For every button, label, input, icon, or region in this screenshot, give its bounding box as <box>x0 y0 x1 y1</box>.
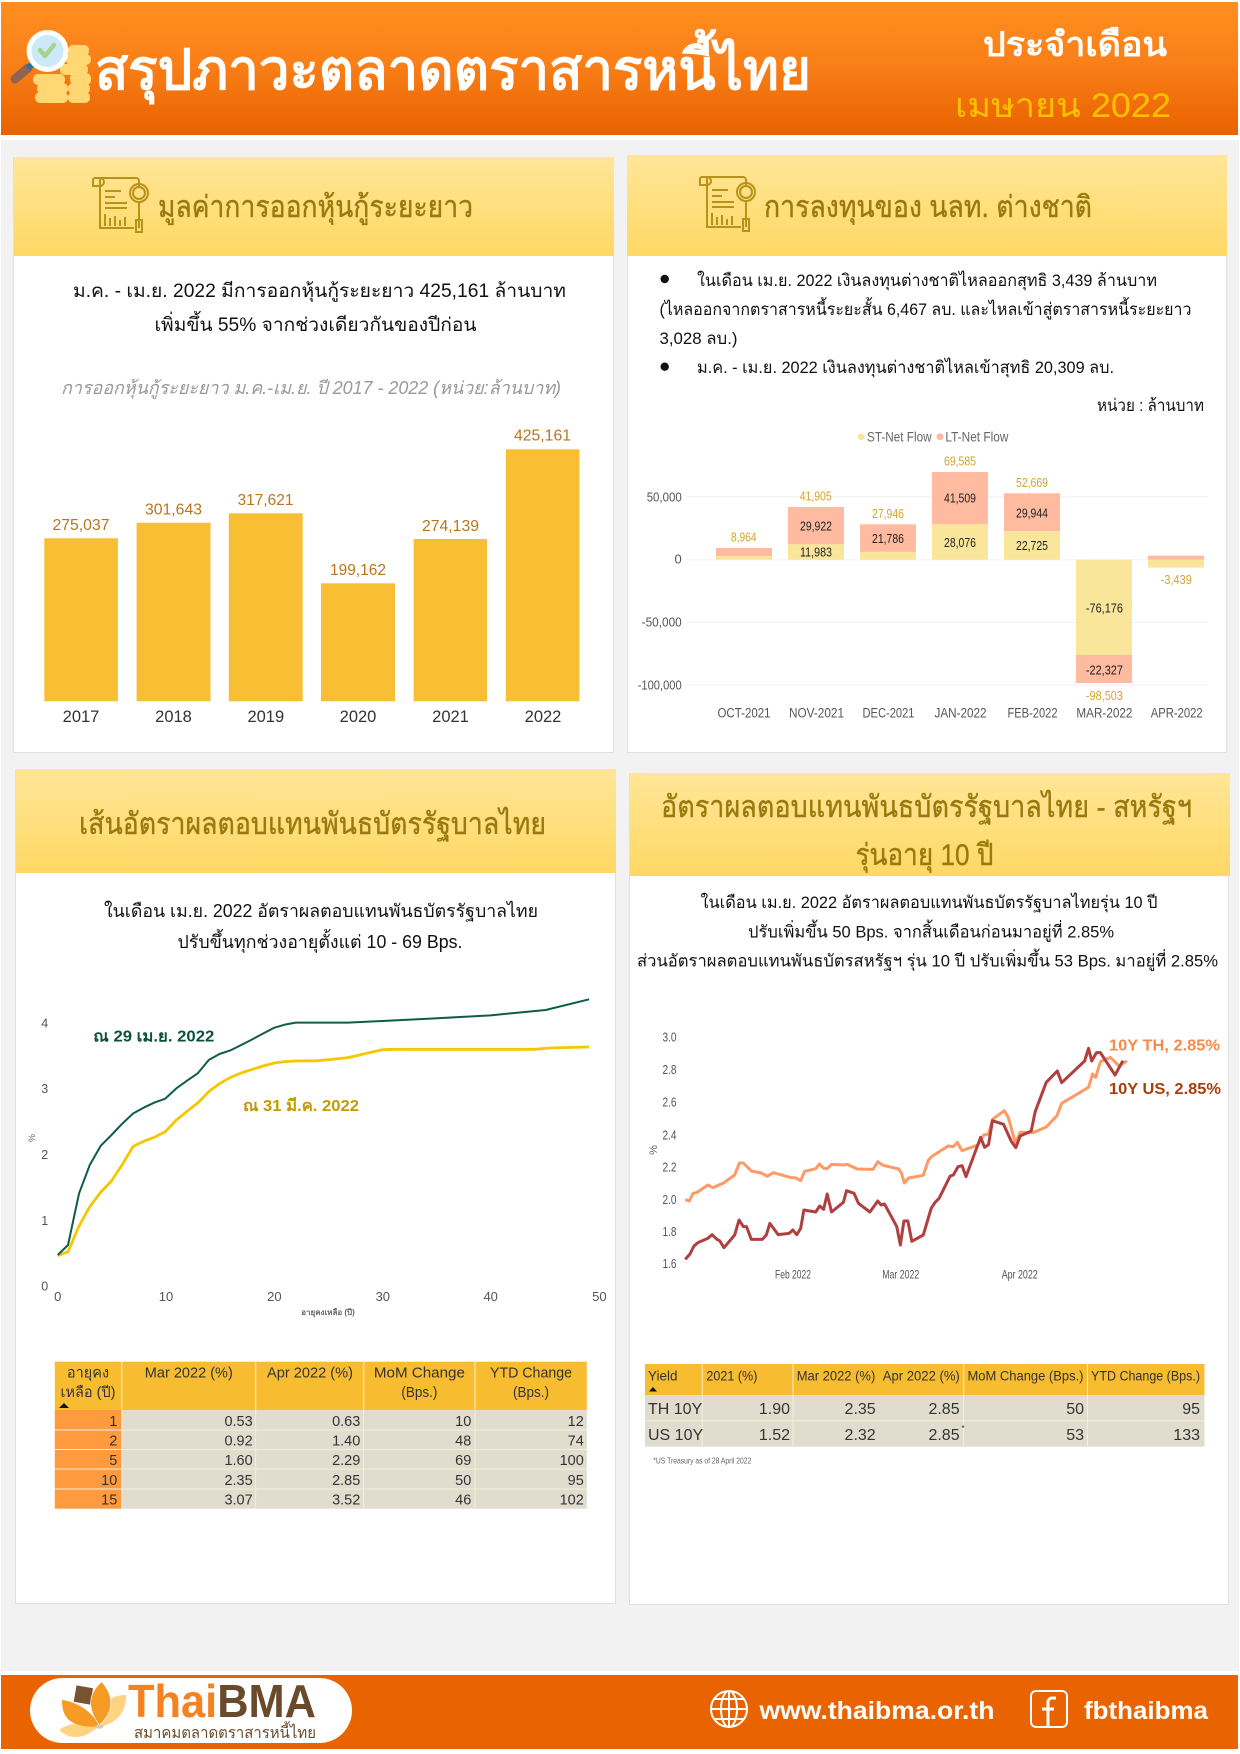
table: 10-year yield comparison: YTD Change (Bps.) <box>1091 1369 1200 1384</box>
table: yield changes by maturity: 100 <box>560 1453 584 1469</box>
table: 10-year yield comparison: Apr 2022 (%) <box>883 1369 960 1384</box>
table: yield changes by maturity: Apr 2022 (%) <box>267 1366 353 1382</box>
bar chart: issuance by year: 2019 <box>247 708 284 726</box>
stacked bar chart: net flows: FEB-2022 <box>1008 706 1058 721</box>
summary text: ในเดือน เม.ย. 2022 อัตราผลตอบแทนพันธบัตรรัฐบาลไทยรุ่น 10 ปี <box>700 892 1158 913</box>
table: yield changes by maturity: 12 <box>568 1414 584 1430</box>
stacked bar chart: net flows: 0 <box>674 552 682 567</box>
table: yield changes by maturity: 74 <box>568 1434 584 1450</box>
table: yield changes by maturity: 1 <box>109 1414 117 1430</box>
summary text <box>104 900 538 953</box>
table: yield changes by maturity: 0.92 <box>224 1434 253 1450</box>
stacked bar chart: net flows: NOV-2021 <box>789 706 844 721</box>
table: yield changes by maturity: (Bps.) <box>401 1385 437 1401</box>
title: สรุปภาวะตลาดตราสารหนี้ไทย <box>95 29 811 105</box>
heading: เส้นอัตราผลตอบแทนพันธบัตรรัฐบาลไทย <box>79 806 546 842</box>
table: 10-year yield comparison: 2.32 <box>845 1427 876 1444</box>
table: yield changes by maturity: YTD Change <box>490 1366 572 1382</box>
table: yield changes by maturity: 69 <box>455 1453 471 1469</box>
stacked bar chart: net flows <box>638 454 1208 721</box>
logo wordmark: ThaiBMA <box>128 1675 316 1727</box>
bar chart: issuance by year <box>44 428 579 726</box>
line chart: 10-year yields: Mar 2022 <box>882 1268 919 1282</box>
table: yield changes by maturity: 50 <box>455 1473 471 1489</box>
bullet text: 3,028 ลบ.) <box>660 329 738 348</box>
line chart: yield curve: 3 <box>41 1082 48 1096</box>
line chart: yield curve: 4 <box>41 1016 48 1030</box>
icon: globe <box>711 1691 747 1727</box>
bar chart: issuance by year: 425,161 <box>514 428 571 445</box>
facebook handle: fbthaibma <box>1084 1697 1209 1725</box>
bar chart: issuance by year: 301,643 <box>145 501 202 518</box>
unit note: หน่วย : ล้านบาท <box>1097 396 1204 415</box>
summary text: ส่วนอัตราผลตอบแทนพันธบัตรสหรัฐฯ รุ่น 10 ปี ปรับเพิ่มขึ้น 53 Bps. มาอยู่ที่ 2.85% <box>637 949 1218 972</box>
label: TH series: 10Y TH, 2.85% <box>1109 1038 1220 1055</box>
table: yield changes by maturity: (Bps.) <box>513 1385 549 1401</box>
website: www.thaibma.or.th <box>758 1697 994 1725</box>
stacked bar chart: net flows: OCT-2021 <box>718 706 770 721</box>
table: yield changes by maturity: 48 <box>455 1434 471 1450</box>
table: yield changes by maturity: 10 <box>101 1473 117 1489</box>
line chart: yield curve: 30 <box>376 1289 390 1304</box>
stacked bar chart: net flows: 22,725 <box>1016 538 1048 553</box>
label: month and year: เมษายน 2022 <box>955 87 1171 125</box>
icon: report with magnifier <box>93 178 148 232</box>
line chart: 10-year yields: % <box>648 1145 660 1155</box>
table: 10-year yield comparison: 95 <box>1182 1401 1200 1418</box>
line chart: 10-year yields: Feb 2022 <box>775 1268 811 1282</box>
panel: long-term bond issuance <box>14 157 614 752</box>
table: yield changes by maturity: 5 <box>109 1453 117 1469</box>
panel: Thai vs US 10-year yields <box>630 773 1230 1604</box>
panel: Thai government yield curve <box>16 769 616 1604</box>
icon: facebook <box>1031 1691 1067 1727</box>
table: 10-year yield comparison: 2.35 <box>845 1401 876 1418</box>
bar chart: issuance by year: 2020 <box>340 708 376 726</box>
line chart: yield curve: 0 <box>41 1280 48 1294</box>
line chart: 10-year yields: 3.0 <box>662 1030 676 1045</box>
icon: coins and magnifier <box>15 30 91 103</box>
table: 10-year yield comparison: * <box>962 1424 965 1433</box>
table: yield changes by maturity: MoM Change <box>374 1366 465 1382</box>
line chart: yield curve: อายุคงเหลือ (ปี) <box>301 1307 355 1318</box>
line chart: 10-year yields: 2.8 <box>662 1062 676 1077</box>
table: 10-year yield comparison: 2021 (%) <box>706 1369 757 1384</box>
legend <box>858 429 1009 445</box>
stacked bar chart: net flows: 21,786 <box>872 531 904 546</box>
summary text <box>73 280 566 336</box>
table: yield changes by maturity: 0.53 <box>224 1414 253 1430</box>
table: 10-year yield comparison: 53 <box>1066 1427 1084 1444</box>
line chart: 10-year yields: 2.2 <box>662 1160 676 1175</box>
line chart: yield curve: 10 <box>159 1289 173 1304</box>
stacked bar chart: net flows: 50,000 <box>647 490 682 505</box>
stacked bar chart: net flows: MAR-2022 <box>1076 706 1132 721</box>
line chart: yield curve: 50 <box>592 1289 607 1304</box>
label: US series: 10Y US, 2.85% <box>1109 1081 1221 1098</box>
table: yield changes by maturity: 95 <box>568 1473 584 1489</box>
stacked bar chart: net flows: APR-2022 <box>1151 706 1203 721</box>
table: yield changes by maturity: 15 <box>101 1493 117 1509</box>
logo pill <box>30 1675 352 1743</box>
bar chart: issuance by year: 2022 <box>525 708 561 726</box>
table: 10-year yield comparison: Mar 2022 (%) <box>797 1369 875 1384</box>
bar chart: issuance by year: 2017 <box>63 708 99 726</box>
stacked bar chart: net flows: 52,669 <box>1016 475 1048 490</box>
line chart: yield curve <box>27 999 607 1318</box>
stacked bar chart: net flows: -22,327 <box>1086 662 1123 677</box>
stacked bar chart: net flows: -98,503 <box>1086 688 1123 703</box>
line chart: yield curve: 1 <box>41 1214 48 1228</box>
table: yield changes by maturity: 3.07 <box>224 1493 253 1509</box>
table: yield changes by maturity: 2 <box>109 1434 117 1450</box>
summary text <box>637 892 1218 972</box>
summary text: เพิ่มขึ้น 55% จากช่วงเดียวกันของปีก่อน <box>154 311 477 336</box>
heading: อัตราผลตอบแทนพันธบัตรรัฐบาลไทย - สหรัฐฯ <box>661 789 1192 825</box>
table: yield changes by maturity: 46 <box>455 1493 471 1509</box>
chart subtitle: การออกหุ้นกู้ระยะยาว ม.ค.-เม.ย. ปี 2017 - 2022 (หน่วย:ล้านบาท) <box>61 378 561 399</box>
bar chart: issuance by year: 2018 <box>155 708 192 726</box>
stacked bar chart: net flows: 41,509 <box>944 491 976 506</box>
table: yield changes by maturity: 102 <box>560 1493 584 1509</box>
logo tagline: สมาคมตลาดตราสารหนี้ไทย <box>134 1721 316 1742</box>
stacked bar chart: net flows: 27,946 <box>872 506 904 521</box>
stacked bar chart: net flows: 8,964 <box>731 530 757 545</box>
table: yield changes by maturity: 3.52 <box>332 1493 360 1509</box>
line chart: 10-year yields: 1.6 <box>662 1256 676 1271</box>
label: monthly: ประจำเดือน <box>983 26 1167 64</box>
icon: lotus <box>59 1682 126 1737</box>
table: yield changes by maturity: 0.63 <box>332 1414 360 1430</box>
table: 10-year yield comparison: 133 <box>1173 1427 1200 1444</box>
table: 10-year yield comparison: 50 <box>1066 1401 1084 1418</box>
summary text: ปรับเพิ่มขึ้น 50 Bps. จากสิ้นเดือนก่อนมาอยู่ที่ 2.85% <box>748 920 1114 943</box>
legend: ST-Net Flow <box>867 429 932 445</box>
table: yield changes by maturity: 10 <box>455 1414 471 1430</box>
heading <box>661 789 1192 874</box>
stacked bar chart: net flows: 29,922 <box>800 519 832 534</box>
header banner <box>1 2 1238 135</box>
stacked bar chart: net flows: -50,000 <box>642 615 682 630</box>
table: yield changes by maturity <box>55 1362 587 1509</box>
table: yield changes by maturity: 1.60 <box>224 1453 253 1469</box>
summary text: ปรับขึ้นทุกช่วงอายุตั้งแต่ 10 - 69 Bps. <box>178 929 462 953</box>
stacked bar chart: net flows: -3,439 <box>1161 572 1192 587</box>
footnote: *US Treasury as of 28 April 2022 <box>653 1456 752 1465</box>
stacked bar chart: net flows: -100,000 <box>638 677 682 692</box>
table: 10-year yield comparison: MoM Change (Bps.) <box>968 1369 1084 1384</box>
line chart: 10-year yields: 1.8 <box>662 1224 676 1239</box>
bar chart: issuance by year: 199,162 <box>330 562 386 579</box>
table: 10-year yield comparison: 1.52 <box>759 1427 790 1444</box>
icon: report with magnifier <box>700 177 755 231</box>
line chart: yield curve: 2 <box>41 1148 48 1162</box>
line chart: 10-year yields: 2.0 <box>662 1192 676 1207</box>
stacked bar chart: net flows: 11,983 <box>800 545 832 560</box>
bullet text: (ไหลออกจากตราสารหนี้ระยะสั้น 6,467 ลบ. และไหลเข้าสู่ตราสารหนี้ระยะยาว <box>660 297 1192 320</box>
summary text: ในเดือน เม.ย. 2022 อัตราผลตอบแทนพันธบัตรรัฐบาลไทย <box>104 900 538 922</box>
bullet text: ม.ค. - เม.ย. 2022 เงินลงทุนต่างชาติไหลเข้าสุทธิ 20,309 ลบ. <box>697 357 1114 378</box>
table: 10-year yield comparison: Yield <box>648 1369 678 1384</box>
table: yield changes by maturity: เหลือ (ปี) <box>60 1384 116 1401</box>
line chart: 10-year yields <box>648 1030 1127 1282</box>
line chart: 10-year yields: 2.4 <box>662 1127 676 1142</box>
table: 10-year yield comparison: 1.90 <box>759 1401 790 1418</box>
bar chart: issuance by year: 274,139 <box>422 518 479 535</box>
bar chart: issuance by year: 275,037 <box>52 517 110 534</box>
table: 10-year yield comparison: 2.85 <box>928 1401 960 1418</box>
table: yield changes by maturity: 2.35 <box>224 1473 253 1489</box>
stacked bar chart: net flows: 28,076 <box>944 535 976 550</box>
stacked bar chart: net flows: 29,944 <box>1016 505 1048 520</box>
table: 10-year yield comparison: 2.85 <box>928 1427 960 1444</box>
stacked bar chart: net flows: 41,905 <box>800 489 832 504</box>
bullet text: ในเดือน เม.ย. 2022 เงินลงทุนต่างชาติไหลออกสุทธิ 3,439 ล้านบาท <box>697 270 1157 291</box>
table: yield changes by maturity: Mar 2022 (%) <box>145 1366 233 1382</box>
table: 10-year yield comparison: TH 10Y <box>648 1401 703 1418</box>
table: 10-year yield comparison <box>645 1364 1204 1447</box>
bullet text <box>660 270 1192 378</box>
line chart: 10-year yields: Apr 2022 <box>1002 1268 1038 1282</box>
stacked bar chart: net flows: -76,176 <box>1086 601 1123 616</box>
table: yield changes by maturity: 1.40 <box>332 1434 360 1450</box>
line chart: yield curve: % <box>27 1134 37 1142</box>
line chart: yield curve: 40 <box>483 1289 498 1304</box>
line chart: yield curve: 0 <box>54 1289 61 1304</box>
table: yield changes by maturity: อายุคง <box>67 1366 109 1382</box>
bar chart: issuance by year: 317,621 <box>238 492 294 509</box>
heading: การลงทุนของ นลท. ต่างชาติ <box>764 191 1092 226</box>
legend: LT-Net Flow <box>945 429 1009 445</box>
label: April curve: ณ 29 เม.ย. 2022 <box>93 1029 214 1046</box>
table: 10-year yield comparison: US 10Y <box>648 1427 703 1444</box>
line chart: 10-year yields: 2.6 <box>662 1095 676 1110</box>
line chart: yield curve: 20 <box>267 1289 282 1304</box>
stacked bar chart: net flows: DEC-2021 <box>862 706 914 721</box>
bar chart: issuance by year: 2021 <box>432 708 469 726</box>
heading: มูลค่าการออกหุ้นกู้ระยะยาว <box>158 191 473 226</box>
heading: รุ่นอายุ 10 ปี <box>856 839 994 874</box>
table: yield changes by maturity: 2.85 <box>332 1473 360 1489</box>
label: March curve: ณ 31 มี.ค. 2022 <box>243 1096 359 1115</box>
stacked bar chart: net flows: JAN-2022 <box>934 706 986 721</box>
summary text: ม.ค. - เม.ย. 2022 มีการออกหุ้นกู้ระยะยาว 425,161 ล้านบาท <box>73 280 566 303</box>
table: yield changes by maturity: 2.29 <box>332 1453 360 1469</box>
panel: foreign investment <box>627 155 1227 752</box>
footer banner <box>1 1675 1238 1749</box>
stacked bar chart: net flows: 69,585 <box>944 454 976 469</box>
